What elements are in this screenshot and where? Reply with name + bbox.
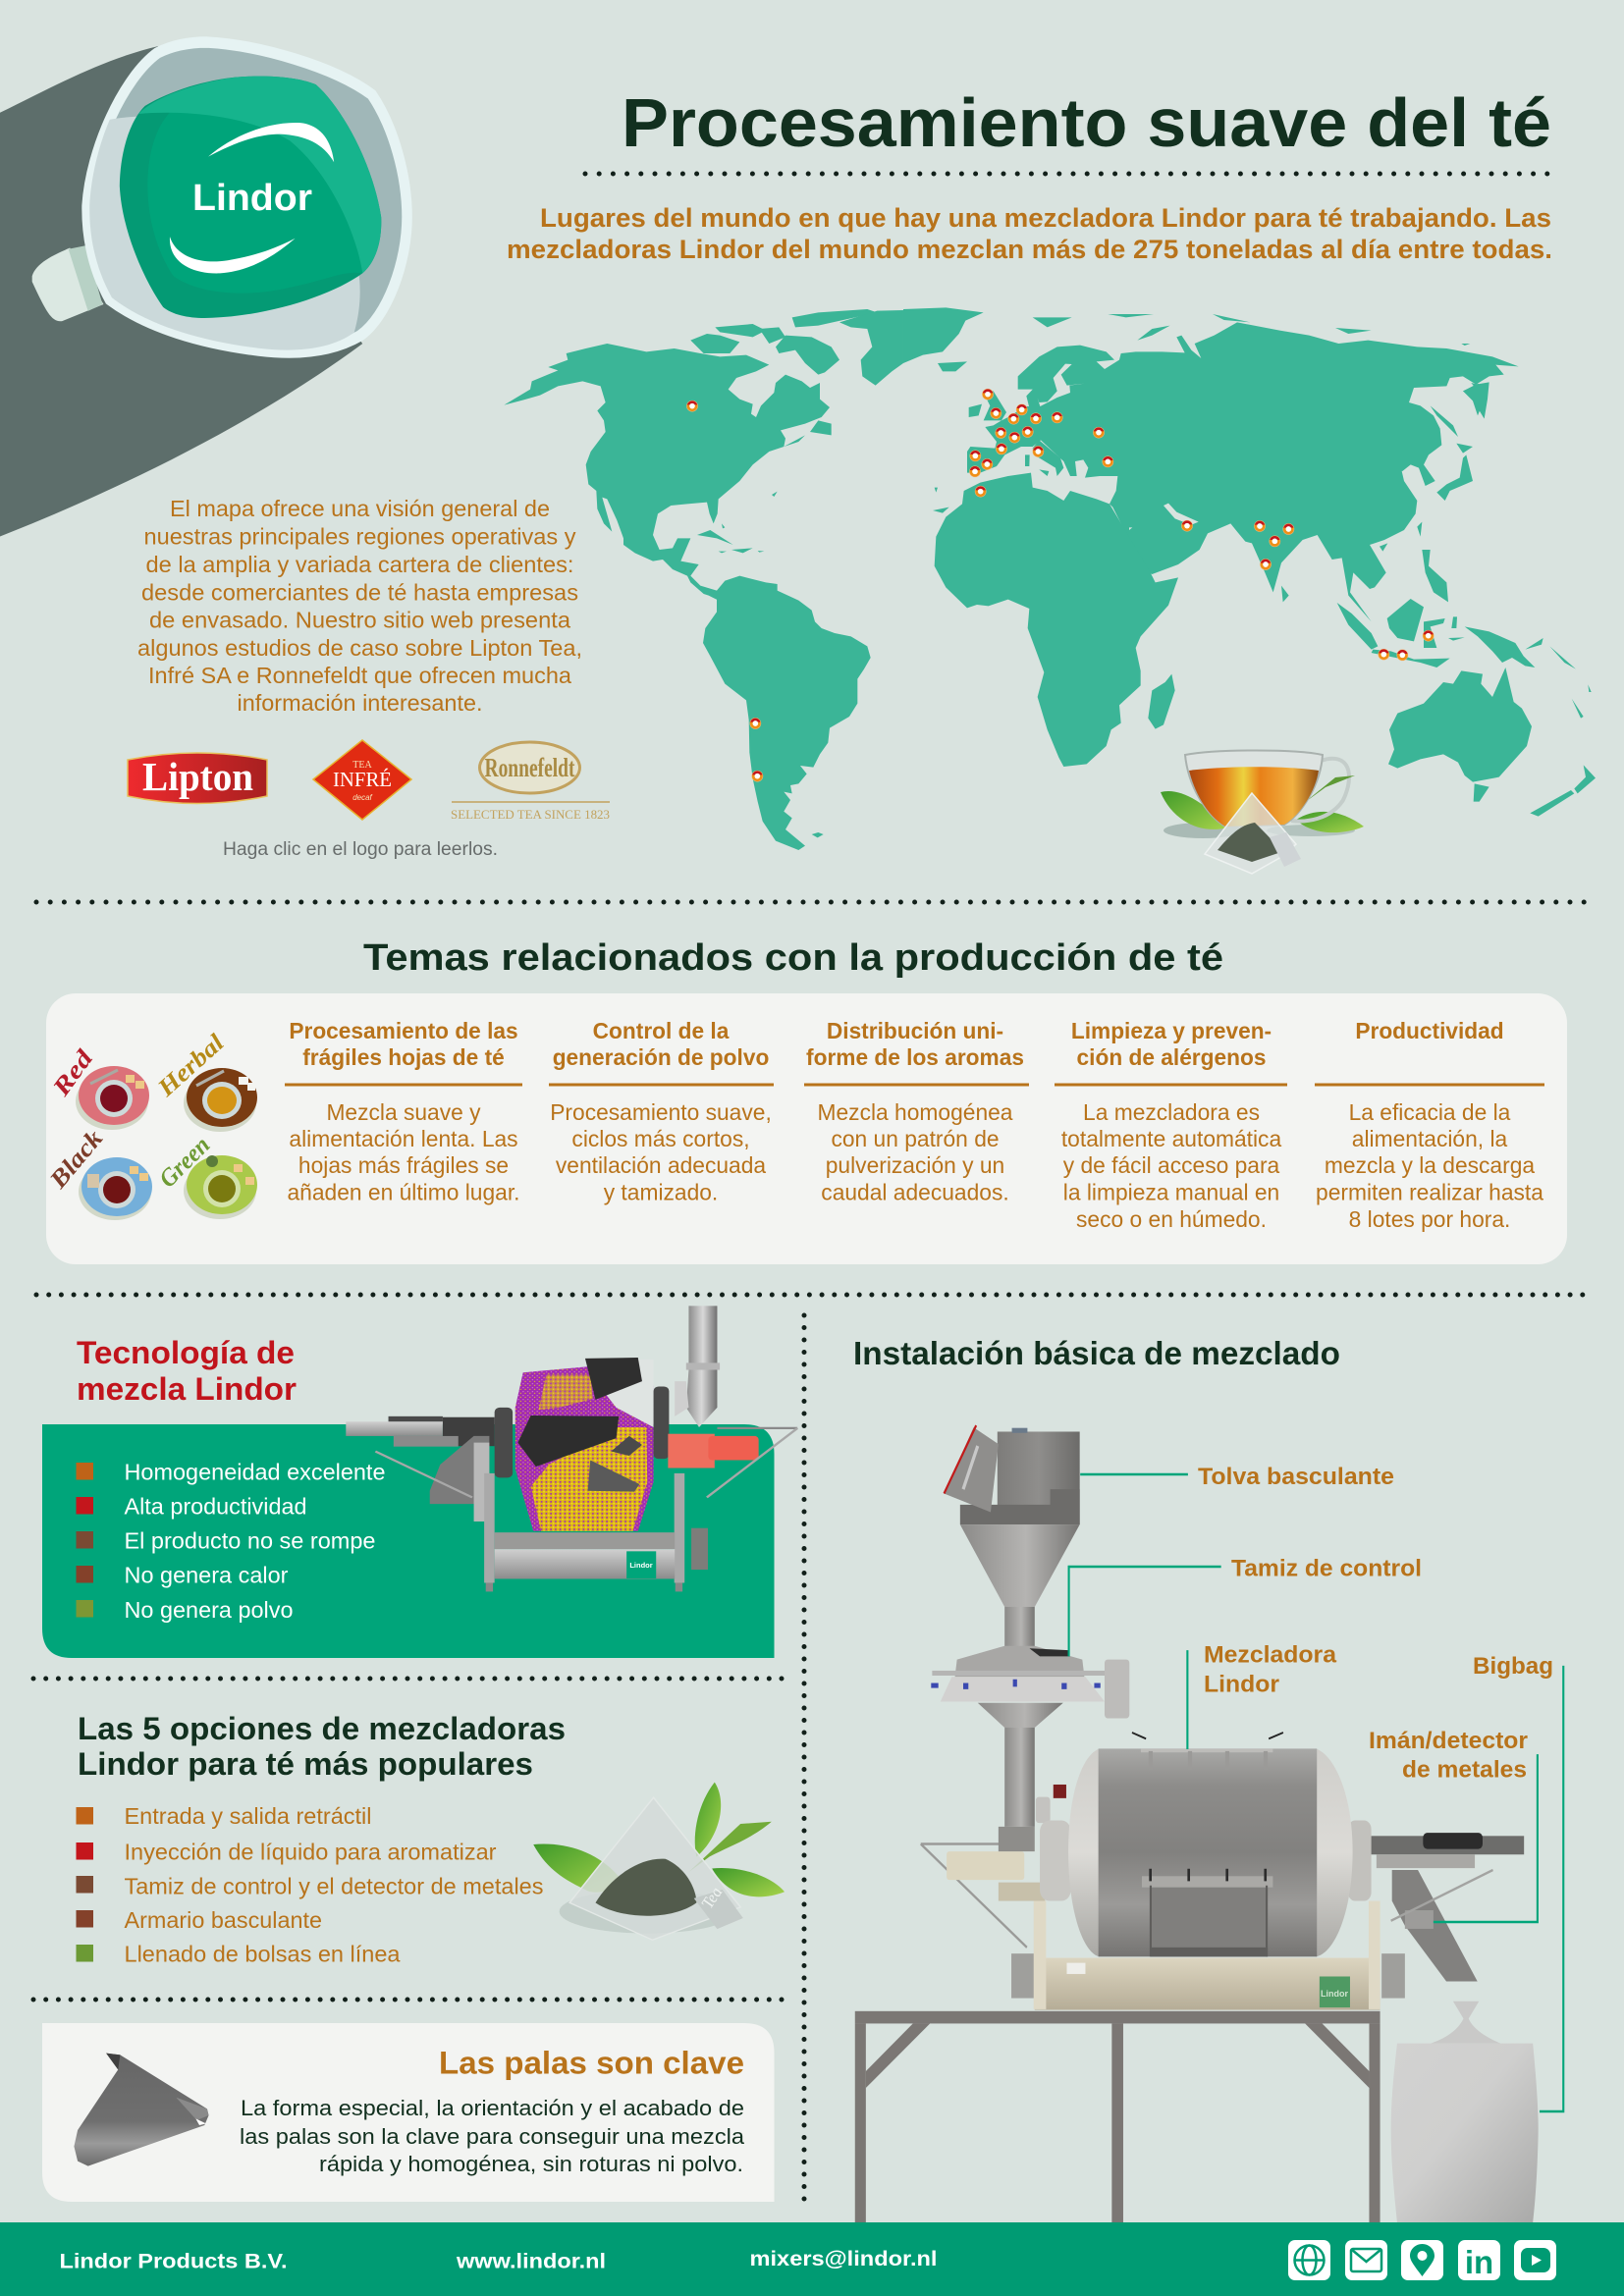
footer: website: www.lindor.nl <box>456 2250 606 2273</box>
mug logo with shadow <box>0 42 407 536</box>
paragraph: map overview <box>137 496 582 716</box>
list: options: Armario basculante <box>124 1907 322 1933</box>
list: options: Inyección de líquido para aromatizar <box>124 1840 497 1865</box>
column: cleaning: y de fácil acceso para <box>1063 1152 1280 1178</box>
title: Procesamiento suave del té <box>622 84 1551 161</box>
column: aroma distribution: Mezcla homogénea <box>818 1099 1013 1125</box>
icon: location pin <box>1401 2240 1443 2280</box>
text: paddles: La forma especial, la orientación y el acabado de <box>241 2096 744 2120</box>
icon: herbal tea cup: Herbal <box>152 1030 230 1102</box>
illustration: mixer cutaway <box>346 1306 797 1591</box>
column: fragile leaves: añaden en último lugar. <box>287 1180 520 1205</box>
mixer drum <box>1040 1733 1372 1956</box>
icon: red tea cup <box>47 1045 149 1130</box>
list: options: Tamiz de control y el detector de metales <box>124 1873 544 1898</box>
column: fragile leaves: alimentación lenta. Las <box>289 1126 518 1151</box>
column: aroma distribution: Distribución uni- <box>827 1018 1003 1043</box>
column: fragile leaves: frágiles hojas de té <box>302 1044 505 1070</box>
logo: Ronnefeldt <box>451 742 610 822</box>
caption: logos: Haga clic en el logo para leerlos. <box>223 839 498 860</box>
small mixer logo: Lindor <box>629 1561 653 1570</box>
panel: production topics <box>44 993 1567 1264</box>
heading: mixing technology: mezcla Lindor <box>77 1371 297 1407</box>
column: cleaning: ción de alérgenos <box>1077 1044 1266 1070</box>
heading: production topics: Temas relacionados con la producción de té <box>363 937 1223 979</box>
column: productivity: mezcla y la descarga <box>1325 1152 1535 1178</box>
list: benefits: No genera calor <box>124 1563 289 1588</box>
icon: linkedin <box>1458 2240 1500 2280</box>
paragraph: map overview: desde comerciantes de té hasta empresas <box>141 579 578 605</box>
column: productivity: permiten realizar hasta <box>1316 1180 1543 1205</box>
icon: globe <box>1288 2240 1330 2280</box>
paragraph: map overview: de envasado. Nuestro sitio web presenta <box>149 607 570 632</box>
map location pins <box>686 389 1434 781</box>
column: aroma distribution: forme de los aromas <box>806 1044 1024 1070</box>
paragraph: map overview: Infré SA e Ronnefeldt que ofrecen mucha <box>148 663 571 688</box>
footer: company: Lindor Products B.V. <box>59 2250 287 2273</box>
panel: paddles are key <box>42 2023 774 2202</box>
text: paddles: las palas son la clave para conseguir una mezcla <box>240 2124 745 2149</box>
icon: red tea cup: Red <box>47 1045 99 1102</box>
list: options <box>77 1803 544 1967</box>
logo: Ronnefeldt: SELECTED TEA SINCE 1823 <box>451 807 610 822</box>
column: cleaning: seco o en húmedo. <box>1076 1206 1267 1232</box>
icon: paddle <box>74 2054 209 2166</box>
icon: youtube <box>1514 2240 1556 2280</box>
heading: top 5 options: Lindor para té más populares <box>78 1746 533 1782</box>
column: dust control: Procesamiento suave, <box>550 1099 772 1125</box>
bigbag <box>1391 2002 1539 2223</box>
label: Lindor mixer: Lindor <box>1204 1671 1279 1698</box>
heading: top 5 options <box>78 1711 566 1782</box>
subtitle: Lugares del mundo en que hay una mezcladora Lindor para té trabajando. Las <box>540 203 1551 233</box>
column: cleaning: La mezcladora es <box>1083 1099 1260 1125</box>
label: Lindor mixer: Mezcladora <box>1204 1641 1337 1669</box>
list: benefits: Alta productividad <box>124 1494 306 1520</box>
Greenland, Eurasia and Africa <box>903 307 1519 767</box>
illustration: pyramid tea bag with leaves: Tea <box>697 1885 727 1911</box>
illustration: pyramid tea bag with leaves <box>533 1783 785 1940</box>
label: Lindor mixer <box>1204 1641 1337 1698</box>
Oceania <box>1337 599 1596 817</box>
illustration: basic mixing installation <box>855 1425 1563 2223</box>
label: bigbag: Bigbag <box>1473 1653 1553 1680</box>
column: productivity: alimentación, la <box>1352 1126 1508 1151</box>
icon: herbal tea cup <box>152 1030 257 1132</box>
base logo text: Lindor <box>1321 1989 1348 1999</box>
column: productivity: Productividad <box>1355 1018 1504 1043</box>
North America <box>504 309 903 601</box>
footer <box>0 2222 1624 2296</box>
footer: email: mixers@lindor.nl <box>750 2247 937 2270</box>
heading: top 5 options: Las 5 opciones de mezcladoras <box>78 1711 566 1746</box>
column: dust control: Control de la <box>593 1018 730 1043</box>
text: paddles <box>240 2096 745 2176</box>
panel: green benefits <box>42 1424 774 1658</box>
label: tilting hopper: Tolva basculante <box>1198 1464 1394 1490</box>
logo: Ronnefeldt: Ronnefeldt <box>485 753 575 782</box>
column: productivity <box>1315 1018 1544 1232</box>
column: cleaning: Limpieza y preven- <box>1071 1018 1272 1043</box>
list: benefits: Homogeneidad excelente <box>124 1459 385 1484</box>
mixer base <box>1011 1901 1405 2010</box>
list: benefits <box>77 1459 385 1623</box>
column: cleaning <box>1055 1018 1287 1232</box>
table <box>855 2011 1380 2223</box>
icon: green tea cup <box>154 1132 257 1219</box>
column: productivity: La eficacia de la <box>1349 1099 1511 1125</box>
subtitle <box>507 203 1552 264</box>
Madagascar <box>1148 674 1175 729</box>
column: fragile leaves: Mezcla suave y <box>326 1099 481 1125</box>
heading: mixing technology <box>77 1335 297 1407</box>
paragraph: map overview: El mapa ofrece una visión general de <box>170 496 550 521</box>
column: dust control: ventilación adecuada <box>556 1152 766 1178</box>
text: paddles: rápida y homogénea, sin roturas ni polvo. <box>319 2152 743 2176</box>
icon: linkedin: in <box>1465 2244 1493 2280</box>
icon: black tea cup <box>44 1125 152 1220</box>
label: magnet or metal detector: Imán/detector <box>1369 1728 1528 1754</box>
logo: Infré: TEA <box>352 760 372 771</box>
right arm and outlet <box>1372 1833 1524 1982</box>
column: dust control <box>549 1018 774 1205</box>
check sieve <box>931 1646 1129 1827</box>
column: dust control: ciclos más cortos, <box>571 1126 750 1151</box>
icon: black tea cup: Black <box>44 1125 109 1195</box>
icon: green tea cup: Green <box>154 1132 215 1193</box>
heading: basic installation: Instalación básica de mezclado <box>853 1335 1340 1371</box>
column: fragile leaves: Procesamiento de las <box>289 1018 518 1043</box>
column: aroma distribution: con un patrón de <box>831 1126 1000 1151</box>
heading: mixing technology: Tecnología de <box>77 1335 295 1370</box>
leader lines <box>1069 1474 1563 2111</box>
logo: Infré <box>313 740 411 820</box>
subtitle: mezcladoras Lindor del mundo mezclan más de 275 toneladas al día entre todas. <box>507 235 1552 264</box>
label: magnet or metal detector: de metales <box>1402 1757 1527 1783</box>
East Asian islands <box>1281 328 1473 602</box>
South America <box>703 576 871 850</box>
logo: Lipton: Lipton <box>142 754 253 799</box>
icon: tea cup with pyramid bag <box>1161 750 1364 874</box>
paragraph: map overview: nuestras principales regiones operativas y <box>143 524 576 550</box>
logo wordmark: Lindor <box>192 178 312 219</box>
column: dust control: y tamizado. <box>604 1180 718 1205</box>
list: options: Entrada y salida retráctil <box>124 1803 371 1829</box>
paragraph: map overview: información interesante. <box>238 690 483 716</box>
label: magnet or metal detector <box>1369 1728 1528 1783</box>
paragraph: map overview: algunos estudios de caso sobre Lipton Tea, <box>137 635 582 661</box>
list: benefits: No genera polvo <box>124 1597 293 1623</box>
column: aroma distribution: pulverización y un <box>826 1152 1004 1178</box>
world map <box>504 307 1596 850</box>
column: fragile leaves <box>285 1018 522 1205</box>
column: fragile leaves: hojas más frágiles se <box>298 1152 509 1178</box>
label: check sieve: Tamiz de control <box>1231 1555 1422 1582</box>
motor and left arm <box>921 1785 1066 1948</box>
list: options: Llenado de bolsas en línea <box>124 1942 401 1967</box>
column: aroma distribution <box>804 1018 1029 1205</box>
column: cleaning: totalmente automática <box>1061 1126 1281 1151</box>
heading: paddles: Las palas son clave <box>439 2046 744 2081</box>
column: aroma distribution: caudal adecuados. <box>821 1180 1009 1205</box>
logo: Infré: INFRÉ <box>333 768 392 791</box>
list: benefits: El producto no se rompe <box>124 1527 375 1553</box>
paragraph: map overview: de la amplia y variada cartera de clientes: <box>145 552 573 577</box>
column: productivity: 8 lotes por hora. <box>1349 1206 1510 1232</box>
tipping hopper <box>944 1425 1080 1647</box>
icon: mail <box>1345 2240 1387 2280</box>
logo: Infré: decaf <box>352 793 373 802</box>
column: cleaning: la limpieza manual en <box>1063 1180 1279 1205</box>
column: dust control: generación de polvo <box>553 1044 769 1070</box>
